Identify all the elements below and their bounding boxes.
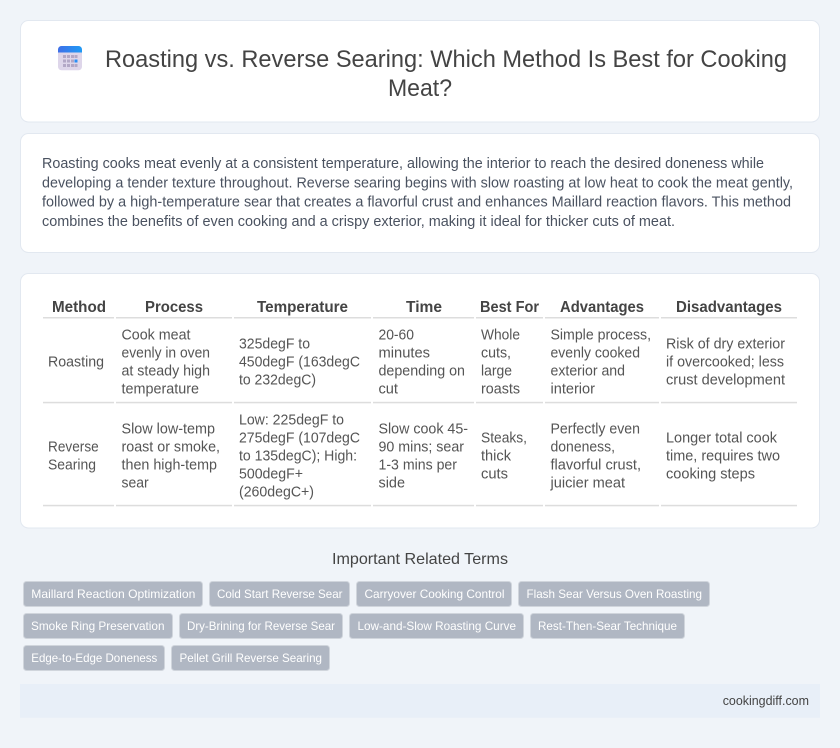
table header row: Advantages: [560, 299, 644, 316]
tag: [180, 614, 342, 638]
table row: Roasting: depending on: [378, 363, 465, 379]
tag: [24, 646, 164, 670]
table header row: Disadvantages: [676, 299, 782, 316]
table row: Roasting: evenly cooked: [550, 345, 640, 361]
title: Roasting vs. Reverse Searing: Which Method Is Best for Cooking: [105, 46, 787, 73]
table header row: Time: [406, 299, 442, 316]
table row: Roasting: 325degF to: [239, 336, 310, 352]
table row: Reverse Searing: Steaks,: [481, 430, 527, 446]
table row: Roasting: if overcooked; less: [666, 354, 784, 370]
table row: Reverse Searing: cooking steps: [666, 466, 755, 482]
table row: Roasting: exterior and: [550, 363, 625, 379]
table row: Reverse Searing: (260degC+): [239, 484, 314, 500]
tag: [24, 614, 172, 638]
table header row: Method: [52, 299, 106, 316]
table row: Roasting: minutes: [378, 345, 430, 361]
table row: Roasting: 450degF (163degC: [239, 354, 360, 370]
table row: Reverse Searing: thick: [481, 448, 512, 464]
table row: Reverse Searing: Perfectly even: [550, 421, 640, 437]
tag: Low-and-Slow Roasting Curve: [358, 619, 516, 633]
table row: Roasting: temperature: [122, 381, 199, 397]
table row: Reverse Searing: doneness,: [550, 439, 615, 455]
table row: Roasting: Roasting: [48, 354, 104, 370]
table row: Reverse Searing: [48, 412, 780, 500]
table row: Reverse Searing: Longer total cook: [666, 430, 778, 446]
text block: summary: combines the benefits of even cooking and a crispy exterior, making it ideal for thicker cuts of meat.: [42, 214, 675, 230]
tag: [210, 582, 350, 606]
table row: Reverse Searing: then high-temp: [122, 457, 217, 473]
tag: Smoke Ring Preservation: [31, 619, 164, 633]
table header row: Best For: [480, 299, 539, 316]
tag: [530, 614, 684, 638]
table row: Roasting: to 232degC): [239, 372, 316, 388]
icon: calendar: [58, 46, 82, 70]
tag: Pellet Grill Reverse Searing: [180, 651, 322, 665]
table row: Reverse Searing: sear: [122, 475, 149, 491]
text block: summary: [42, 156, 793, 230]
footer bar: [20, 684, 820, 718]
table header row: [52, 299, 782, 316]
table row: Roasting: interior: [550, 381, 595, 397]
table row: Reverse Searing: time, requires two: [666, 448, 780, 464]
panel: title header: [20, 20, 820, 122]
panel: related term tags: [24, 582, 710, 670]
table row: Roasting: at steady high: [122, 363, 210, 379]
table row: Reverse Searing: Slow cook 45-: [378, 421, 468, 437]
tag: [172, 646, 330, 670]
text block: summary: Roasting cooks meat evenly at a consistent temperature, allowing the interior to reach the desired doneness while: [42, 156, 764, 172]
table row: Roasting: Cook meat: [122, 327, 190, 343]
table row: Roasting: Whole: [481, 327, 520, 343]
table header row: Process: [145, 299, 203, 316]
text block: summary: developing a tender texture throughout. Reverse searing begins with slow roasting at low heat to cook the meat gently,: [42, 175, 793, 191]
title: Meat?: [388, 75, 452, 102]
table row: Reverse Searing: side: [378, 475, 405, 491]
tag: [350, 614, 524, 638]
table row: Reverse Searing: Slow low-temp: [122, 421, 215, 437]
tag: [24, 582, 202, 606]
panel: comparison table: [20, 274, 820, 528]
table row: Reverse Searing: to 135degC); High:: [239, 448, 357, 464]
tag: Rest-Then-Sear Technique: [538, 619, 677, 633]
tag: Carryover Cooking Control: [364, 587, 504, 601]
tag: Dry-Brining for Reverse Sear: [187, 619, 335, 633]
tag: Cold Start Reverse Sear: [217, 587, 342, 601]
table row: Reverse Searing: flavorful crust,: [550, 457, 641, 473]
heading: related terms: Important Related Terms: [332, 551, 508, 568]
table row: Reverse Searing: Reverse: [48, 439, 99, 455]
table row: Roasting: evenly in oven: [122, 345, 210, 361]
table header row: Temperature: [257, 299, 348, 316]
table row: Reverse Searing: juicier meat: [549, 475, 625, 491]
table row: Roasting: cut: [378, 381, 398, 397]
table row: Reverse Searing: 500degF+: [239, 466, 303, 482]
table row: Roasting: [48, 327, 785, 397]
table row: Reverse Searing: 275degF (107degC: [239, 430, 360, 446]
table row: Reverse Searing: 1-3 mins per: [378, 457, 457, 473]
text block: summary: followed by a high-temperature sear that creates a flavorful crust and enhances Maillard reaction flavors. This method: [42, 194, 791, 210]
tag: [518, 582, 710, 606]
table row: Reverse Searing: Low: 225degF to: [239, 412, 344, 428]
table row: Reverse Searing: cuts: [481, 466, 508, 482]
panel: summary paragraph: [20, 134, 820, 252]
table row: Roasting: large: [481, 363, 512, 379]
table row: Roasting: cuts,: [481, 345, 511, 361]
table row: Roasting: Simple process,: [550, 327, 651, 343]
title: [105, 46, 787, 102]
tag: Maillard Reaction Optimization: [31, 587, 195, 601]
table row: Reverse Searing: Searing: [48, 457, 96, 473]
tag: Flash Sear Versus Oven Roasting: [526, 587, 702, 601]
tag: [356, 582, 512, 606]
table row: Roasting: 20-60: [378, 327, 414, 343]
tag: Edge-to-Edge Doneness: [31, 651, 157, 665]
table row: Roasting: crust development: [666, 372, 785, 388]
footer source: cookingdiff.com: [723, 694, 809, 708]
table row: Reverse Searing: roast or smoke,: [122, 439, 220, 455]
table row: Reverse Searing: 90 mins; sear: [378, 439, 464, 455]
table row: Roasting: Risk of dry exterior: [666, 336, 785, 352]
table row: Roasting: roasts: [481, 381, 520, 397]
